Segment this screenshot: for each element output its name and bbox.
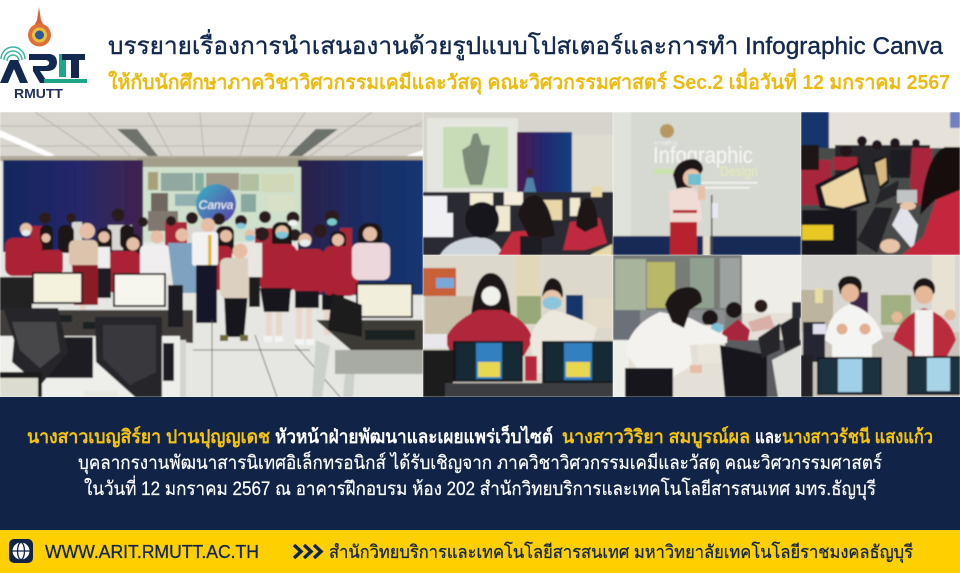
photo: presenter with Infographic Design slide: Design — [720, 163, 758, 179]
floor lines — [193, 320, 340, 397]
people front row hair — [39, 221, 382, 257]
legs — [80, 305, 331, 342]
photo: students at computers — [801, 112, 960, 255]
tower and monitors — [720, 345, 767, 397]
icon: chevrons — [294, 545, 321, 558]
icon: globe — [9, 539, 33, 563]
photo: group photo with Canva screen: Canva — [199, 198, 234, 212]
standing woman — [625, 312, 727, 377]
text line 1 — [27, 424, 933, 449]
text line 1: นางสาวเบญสิร์ยา ปานปุญญเดช — [27, 426, 270, 449]
title: บรรยายเรื่องการนำเสนองานด้วยรูปแบบโปสเตอร์และการทำ Infographic Canva — [108, 29, 944, 61]
chairs — [3, 308, 68, 386]
seated students — [702, 310, 718, 326]
desks — [0, 310, 193, 343]
photo: presenter with Infographic Design slide — [613, 112, 801, 255]
text line 3: ในวันที่ 12 มกราคม 2567 ณ อาคารฝึกอบรม ห้อง 202 สำนักวิทยบริการและเทคโนโลยีสารสนเทศ มทร.ธัญบุรี — [84, 475, 876, 501]
photo: two women with posters — [423, 255, 613, 397]
panel: description — [0, 397, 960, 530]
text line 1: หัวหน้าฝ่ายพัฒนาและเผยแพร่เว็บไซต์ — [275, 424, 553, 448]
logo: ARIT RMUTT — [0, 7, 87, 101]
website url: WWW.ARIT.RMUTT.AC.TH — [45, 542, 259, 562]
photo: presenter with hand slide — [423, 112, 613, 255]
people front row bodies — [5, 238, 358, 296]
text line 1: นางสาววิริยา สมบูรณ์ผล — [562, 426, 750, 449]
subtitle: ให้กับนักศึกษาภาควิชาวิศวกรรมเคมีและวัสดุ คณะวิศวกรรมศาสตร์ Sec.2 เมื่อวันที่ 12 มกราคม 2567 — [108, 67, 950, 95]
photo: group photo with Canva screen — [0, 112, 423, 397]
photo: staff helping students — [613, 255, 801, 397]
text line 1: นางสาวรัชนี แสงแก้ว — [782, 426, 933, 448]
logo wordmark ARIT — [0, 54, 87, 83]
header background — [0, 0, 960, 112]
photo: presenter with Infographic Design slide: Infographic — [653, 142, 753, 168]
photo: presenter with Infographic Design slide: การสร้าง — [654, 140, 677, 147]
heads — [20, 218, 377, 258]
footer bar — [0, 530, 960, 573]
icon: wifi arcs — [1, 47, 25, 61]
monitors — [32, 272, 83, 304]
photo: two men with posters — [801, 255, 960, 397]
organisation name: สำนักวิทยบริการและเทคโนโลยีสารสนเทศ มหาวิทยาลัยเทคโนโลยีราชมงคลธัญบุรี — [329, 541, 913, 563]
people back row — [29, 221, 354, 247]
logo text RMUTT: RMUTT — [14, 86, 63, 101]
text line 1: และ — [755, 427, 782, 448]
icon: university crest — [28, 7, 51, 46]
text line 2: บุคลากรงานพัฒนาสารนิเทศอิเล็กทรอนิกส์ ได้รับเชิญจาก ภาควิชาวิศวกรรมเคมีและวัสดุ คณะวิศวกรรมศาสตร์ — [78, 450, 882, 475]
